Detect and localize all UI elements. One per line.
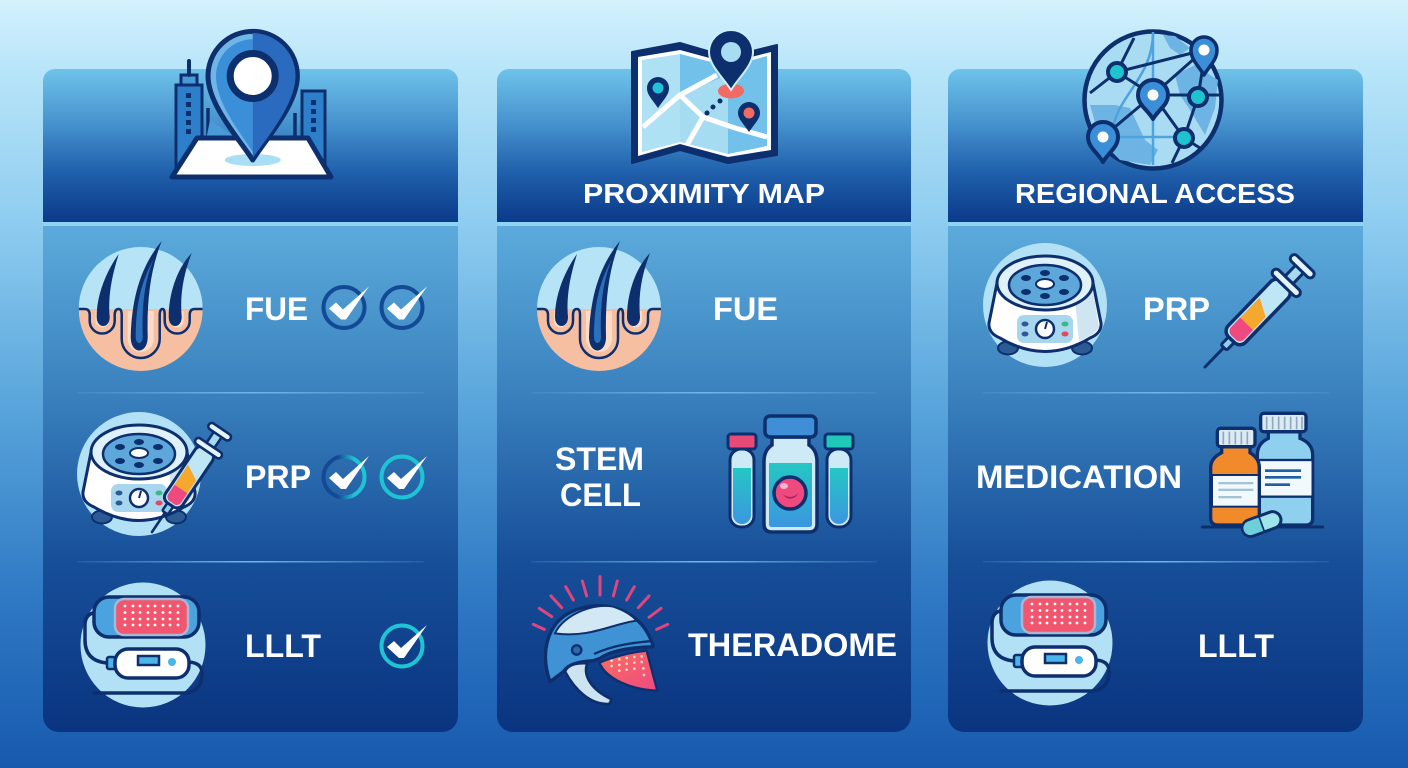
label: Theradome: THERADOME [688, 627, 897, 663]
icon: connected globe [1084, 32, 1222, 168]
panel body: left [43, 226, 458, 732]
row: Stem Cell [555, 416, 853, 532]
icon: check 2 [382, 286, 427, 328]
panel header: left [43, 69, 458, 222]
row: LLLT [988, 580, 1274, 706]
label: LLLT: LLLT [245, 628, 321, 664]
icon: check 1 [324, 456, 369, 498]
panel header: right [948, 69, 1363, 222]
row: PRP [983, 243, 1318, 380]
icon: laser helmet [533, 577, 668, 704]
icon: laser device [80, 582, 206, 708]
icon: syringe [1192, 251, 1318, 380]
icon: hair follicles [537, 241, 661, 371]
icon: check 2 [382, 456, 427, 498]
icon: proximity map [632, 30, 777, 163]
icon: check [382, 625, 427, 666]
label: FUE: FUE [245, 291, 308, 327]
row: FUE [537, 241, 778, 371]
row: Theradome [533, 577, 897, 704]
panel header: middle [497, 69, 911, 222]
icon: city location pin [172, 31, 331, 177]
label: FUE: FUE [713, 291, 778, 327]
icon: centrifuge [983, 243, 1107, 367]
heading: Proximity Map: PROXIMITY MAP [583, 178, 825, 209]
row: Medication [976, 413, 1323, 539]
icon: medicine bottles [1202, 413, 1323, 539]
panel body: middle [497, 226, 911, 732]
panel: right column [948, 32, 1363, 732]
label: Stem Cell: CELL [560, 477, 641, 513]
label: PRP: PRP [245, 459, 311, 495]
panel: left column [43, 31, 458, 732]
row: LLLT [80, 582, 427, 708]
panel: middle column [497, 30, 911, 732]
label: LLLT: LLLT [1198, 628, 1274, 664]
panel body: right [948, 226, 1363, 732]
label: Stem Cell [555, 441, 644, 513]
label: Medication: MEDICATION [976, 459, 1182, 495]
label: Stem Cell: STEM [555, 441, 644, 477]
icon: vials [728, 416, 853, 532]
icon: centrifuge with syringe [77, 412, 234, 541]
heading: Regional Access: REGIONAL ACCESS [1015, 178, 1295, 209]
row: PRP [77, 412, 427, 541]
icon: check 1 [324, 286, 369, 328]
icon: hair follicles [79, 241, 203, 371]
label: PRP: PRP [1143, 291, 1210, 327]
row: FUE [79, 241, 427, 371]
icon: laser device [988, 580, 1112, 706]
